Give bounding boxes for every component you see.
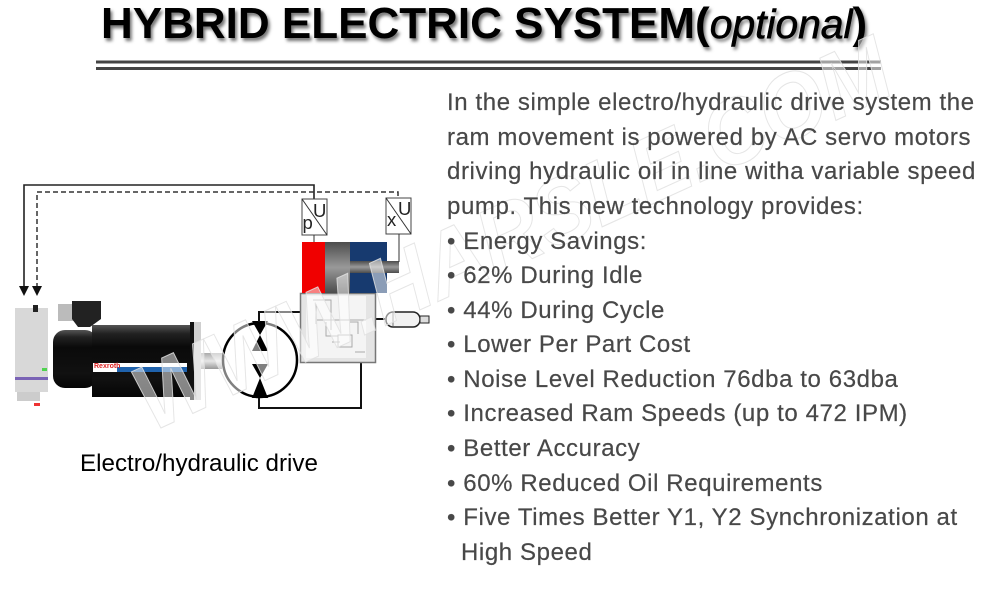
- hydraulic cylinder: [302, 242, 399, 293]
- text: pump. This new technology provides:: [447, 193, 864, 220]
- text: • 62% During Idle: [447, 262, 643, 289]
- position sensor x/U: U: [398, 198, 411, 219]
- position sensor x/U: x: [387, 209, 397, 230]
- text: • Five Times Better Y1, Y2 Synchronization at: [447, 504, 958, 531]
- caption: Electro/hydraulic drive: [80, 450, 318, 477]
- valve block: [300, 294, 376, 362]
- text: • Better Accuracy: [447, 435, 640, 462]
- accumulator: [386, 312, 429, 327]
- signal lines and arrows: [19, 185, 398, 296]
- text: In the simple electro/hydraulic drive system the: [447, 89, 975, 116]
- text: • Noise Level Reduction 76dba to 63dba: [447, 366, 899, 393]
- text: ram movement is powered by AC servo motors: [447, 124, 971, 151]
- pressure sensor p/U: p: [302, 212, 313, 233]
- text: High Speed: [461, 539, 592, 566]
- drive controller: [15, 305, 48, 406]
- text: • 60% Reduced Oil Requirements: [447, 470, 823, 497]
- servo motor: [53, 301, 222, 400]
- text: • Energy Savings:: [447, 228, 647, 255]
- pressure sensor p/U: [302, 199, 327, 242]
- text: • 44% During Cycle: [447, 297, 665, 324]
- title: HYBRID ELECTRIC SYSTEM(optional): [101, 0, 867, 48]
- text: • Increased Ram Speeds (up to 472 IPM): [447, 400, 908, 427]
- position sensor x/U: [386, 198, 411, 262]
- text: • Lower Per Part Cost: [447, 331, 691, 358]
- hydraulic pump symbol: [223, 321, 297, 398]
- title double rule: [96, 60, 881, 70]
- description text: [447, 89, 976, 566]
- pressure sensor p/U: U: [313, 200, 326, 221]
- servo motor: Rexroth: [94, 363, 120, 370]
- text: driving hydraulic oil in line witha variable speed: [447, 158, 976, 185]
- hydraulic lines: [259, 312, 385, 408]
